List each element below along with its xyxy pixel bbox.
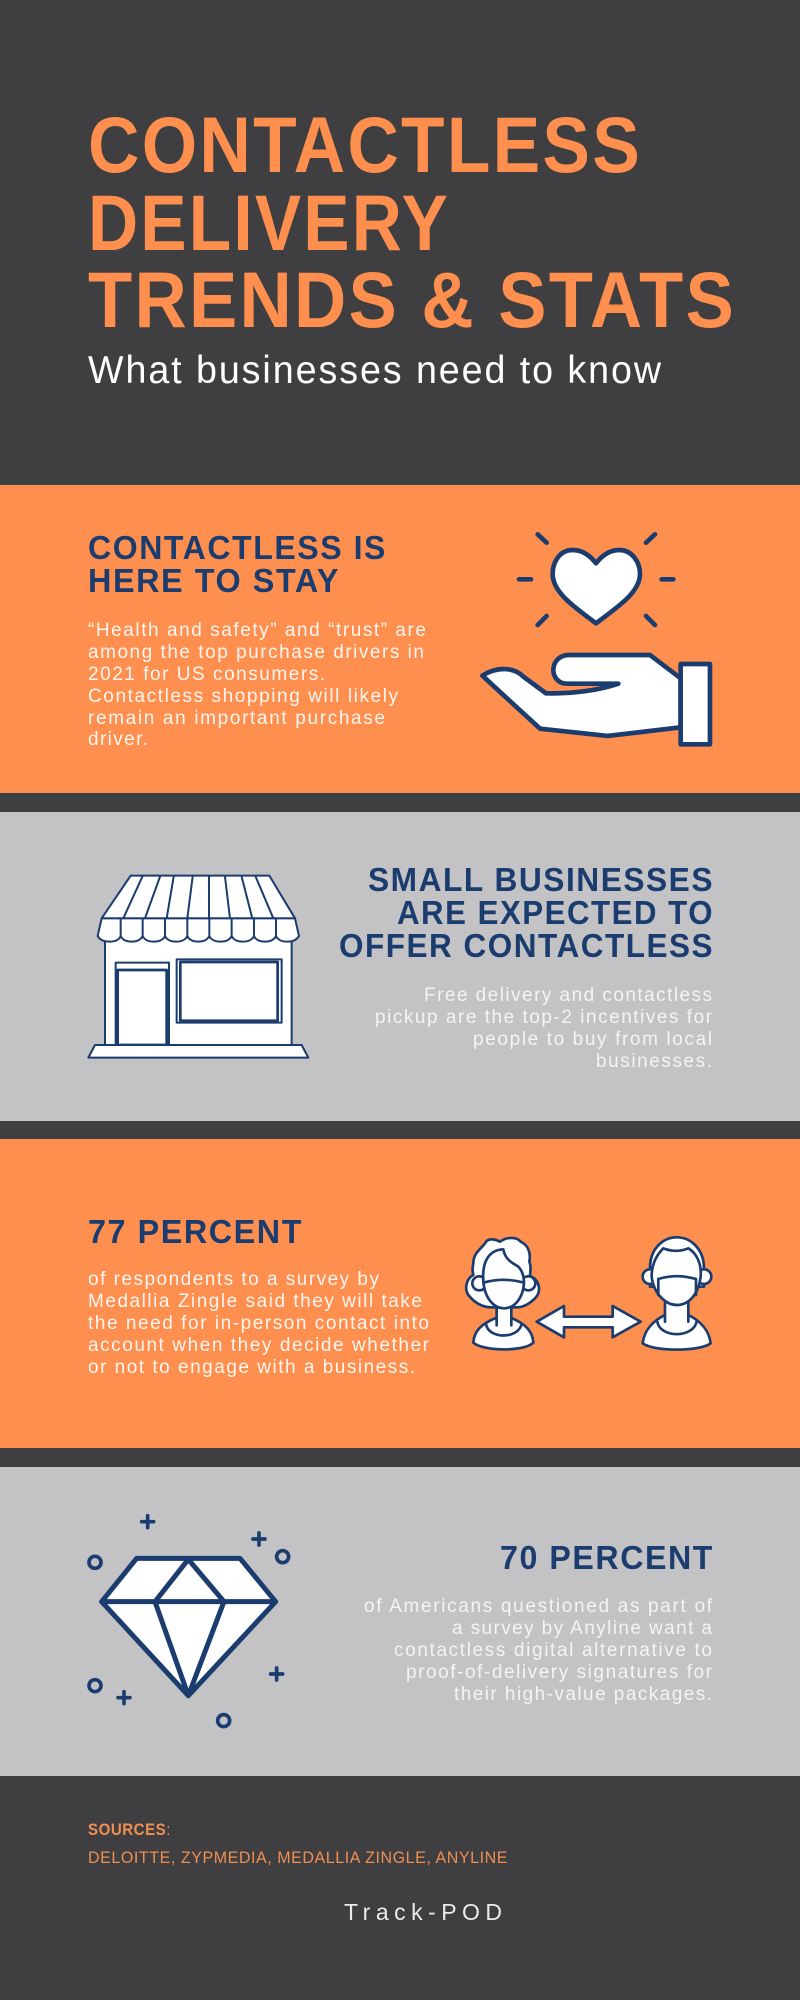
body text: of respondents to a survey by bbox=[88, 1269, 380, 1290]
body text bbox=[364, 1596, 713, 1705]
body text: “Health and safety” and “trust” are bbox=[88, 620, 426, 641]
body text: Contactless shopping will likely bbox=[88, 686, 399, 707]
icon: hand holding heart bbox=[482, 534, 710, 744]
body text: their high-value packages. bbox=[454, 1684, 712, 1705]
heading: SMALL BUSINESSES bbox=[368, 861, 714, 898]
body text: among the top purchase drivers in bbox=[88, 642, 424, 663]
heading: 70 PERCENT bbox=[500, 1539, 714, 1576]
title bbox=[88, 100, 736, 344]
panel: small businesses bbox=[0, 812, 800, 1121]
body text: a survey by Anyline want a bbox=[452, 1618, 712, 1639]
title: TRENDS & STATS bbox=[88, 255, 736, 344]
body text: account when they decide whether bbox=[88, 1335, 430, 1356]
heading: 77 PERCENT bbox=[88, 1213, 303, 1250]
body text bbox=[88, 620, 426, 750]
panel: footer bbox=[88, 1821, 508, 1925]
icon: woman with mask bbox=[466, 1238, 539, 1349]
icon: double arrow bbox=[537, 1306, 641, 1337]
body text: Free delivery and contactless bbox=[424, 985, 712, 1006]
heading bbox=[88, 529, 387, 599]
heading: HERE TO STAY bbox=[88, 562, 340, 599]
body text: driver. bbox=[88, 729, 148, 750]
body text: remain an important purchase bbox=[88, 708, 385, 729]
body text: of Americans questioned as part of bbox=[364, 1596, 713, 1617]
panel: header bbox=[0, 0, 800, 485]
heading: ARE EXPECTED TO bbox=[397, 894, 714, 931]
subtitle: What businesses need to know bbox=[88, 349, 663, 392]
brand name: Track-POD bbox=[344, 1899, 502, 1925]
heading: OFFER CONTACTLESS bbox=[339, 927, 714, 964]
heading bbox=[339, 861, 714, 964]
title: CONTACTLESS bbox=[88, 100, 642, 189]
sources: DELOITTE, ZYPMEDIA, MEDALLIA ZINGLE, ANYLINE bbox=[88, 1848, 508, 1867]
panel: contactless is here to stay bbox=[0, 485, 800, 793]
body text: or not to engage with a business. bbox=[88, 1357, 415, 1378]
body text: pickup are the top-2 incentives for bbox=[375, 1007, 713, 1028]
icon: man with mask bbox=[643, 1237, 711, 1350]
body text bbox=[88, 1269, 430, 1378]
sources bbox=[88, 1821, 508, 1867]
sources: SOURCES: bbox=[88, 1821, 171, 1839]
body text: contactless digital alternative to bbox=[394, 1640, 712, 1661]
panel: 70 percent bbox=[0, 1467, 800, 1776]
body text: proof-of-delivery signatures for bbox=[406, 1662, 713, 1683]
body text: businesses. bbox=[596, 1051, 712, 1072]
body text bbox=[375, 985, 713, 1072]
icon: two masked people with arrow bbox=[466, 1237, 711, 1350]
body text: 2021 for US consumers. bbox=[88, 664, 325, 685]
body text: the need for in-person contact into bbox=[88, 1313, 429, 1334]
title: DELIVERY bbox=[88, 178, 450, 267]
icon: diamond with sparkles bbox=[89, 1516, 289, 1727]
icon: storefront bbox=[88, 876, 308, 1058]
body text: people to buy from local bbox=[473, 1029, 712, 1050]
panel: 77 percent bbox=[0, 1139, 800, 1448]
body text: Medallia Zingle said they will take bbox=[88, 1291, 422, 1312]
heading: CONTACTLESS IS bbox=[88, 529, 387, 566]
